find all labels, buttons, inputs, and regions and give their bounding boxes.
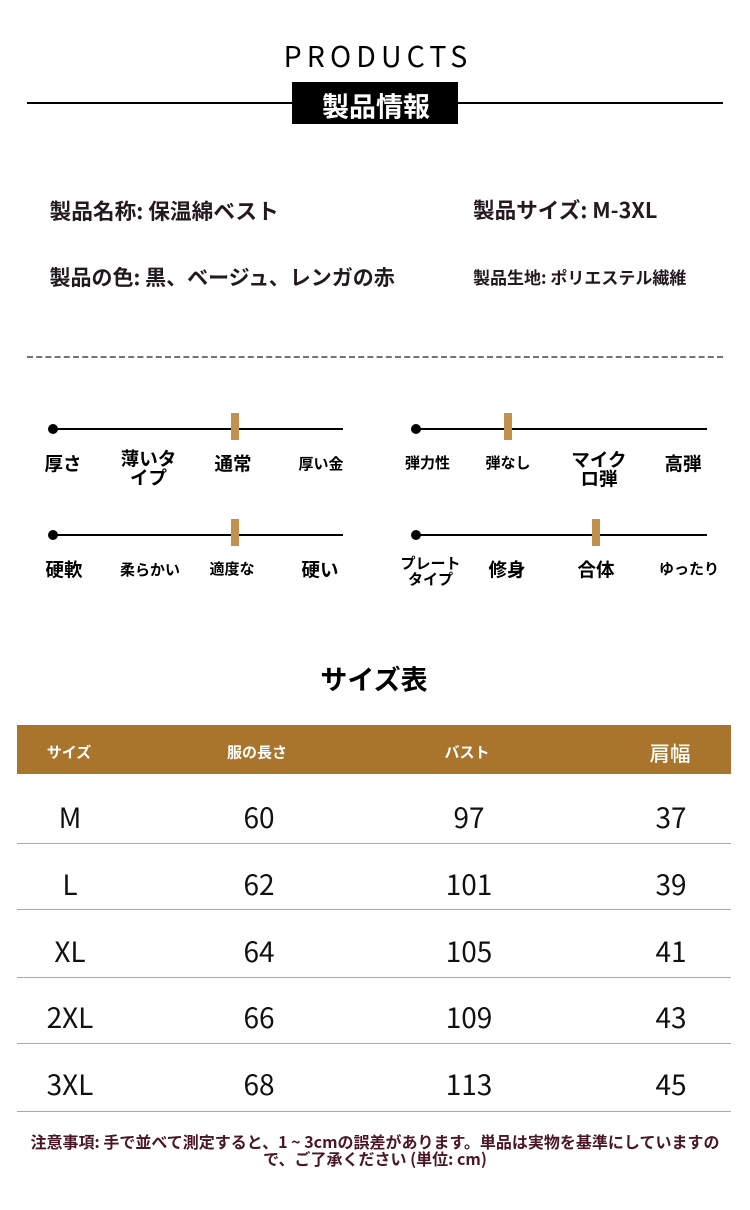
shoulder: 45 xyxy=(655,1064,687,1104)
size: M xyxy=(59,797,81,837)
label: micro stretch: ロ弾 xyxy=(580,466,618,492)
divider line left xyxy=(27,102,293,104)
text: product size: 製品サイズ: M-3XL xyxy=(473,194,657,225)
bust: 97 xyxy=(453,797,485,837)
table row: 3XL xyxy=(47,1064,687,1104)
slider: hardness xyxy=(45,519,343,582)
label: micro stretch xyxy=(571,447,627,492)
marker xyxy=(231,413,239,440)
label: elasticity: 弾力性 xyxy=(405,452,450,473)
label: hardness: 硬軟 xyxy=(45,556,83,582)
shoulder: 39 xyxy=(655,864,687,904)
size: XL xyxy=(54,931,86,971)
bust: 113 xyxy=(446,1064,492,1104)
size: 3XL xyxy=(47,1064,93,1104)
label: thin type xyxy=(121,446,176,491)
label: thin type: イプ xyxy=(130,465,167,491)
divider line right xyxy=(457,102,723,104)
start dot xyxy=(48,424,58,434)
bust: 105 xyxy=(446,931,492,971)
label: micro stretch: マイク xyxy=(571,447,627,473)
marker xyxy=(592,519,600,546)
slider: elasticity xyxy=(405,413,707,492)
label: slim: 修身 xyxy=(488,556,526,582)
label: soft: 柔らかい xyxy=(120,559,180,580)
label: normal: 通常 xyxy=(214,450,252,476)
marker xyxy=(504,413,512,440)
table row: XL xyxy=(54,931,687,971)
header: bust: バスト xyxy=(444,742,490,762)
length: 64 xyxy=(243,931,275,971)
length: 62 xyxy=(243,864,275,904)
header: shoulder: 肩幅 xyxy=(650,737,690,767)
table row: 2XL xyxy=(47,997,687,1037)
label: plate type: タイプ xyxy=(408,568,453,589)
label: moderate: 適度な xyxy=(209,558,255,579)
start dot xyxy=(48,530,58,540)
length: 66 xyxy=(243,997,275,1037)
label: thick: 厚い金 xyxy=(298,453,344,474)
bust: 109 xyxy=(446,997,492,1037)
table row: M xyxy=(59,797,687,837)
heading: size chart: サイズ表 xyxy=(320,658,428,698)
size: 2XL xyxy=(47,997,93,1037)
label: thin type: 薄いタ xyxy=(121,446,176,472)
bust: 101 xyxy=(446,864,492,904)
slider: fit xyxy=(400,519,719,589)
slider: thickness xyxy=(44,413,344,491)
label: hard: 硬い xyxy=(301,556,339,582)
track xyxy=(53,428,343,430)
text: product colours: 製品の色: 黒、ベージュ、レンガの赤 xyxy=(50,262,395,292)
shoulder: 43 xyxy=(655,997,687,1037)
table row: L xyxy=(62,864,687,904)
track xyxy=(53,534,343,536)
footnote: で、ご了承ください (単位: cm) xyxy=(263,1146,487,1170)
label: thickness: 厚さ xyxy=(44,450,82,476)
header: length: 服の長さ xyxy=(227,742,287,762)
table header xyxy=(17,725,731,774)
start dot xyxy=(411,530,421,540)
label: plate type: プレート xyxy=(400,552,461,573)
shoulder: 37 xyxy=(655,797,687,837)
footnote: 注意事項: 手で並べて測定すると、1 ~ 3cmの誤差があります。単品は実物を基準にしていますの xyxy=(31,1129,719,1153)
size: L xyxy=(62,864,78,904)
label: high stretch: 高弾 xyxy=(664,450,702,476)
shoulder: 41 xyxy=(655,931,687,971)
text: product material: 製品生地: ポリエステル繊維 xyxy=(473,264,686,289)
marker xyxy=(231,519,239,546)
track xyxy=(416,428,707,430)
badge text: 製品情報 xyxy=(322,86,430,124)
label: loose: ゆったり xyxy=(659,558,719,579)
heading badge: product info xyxy=(292,82,458,124)
dashed separator xyxy=(27,356,723,358)
label: plate type xyxy=(400,552,461,589)
label: no stretch: 弾なし xyxy=(485,452,531,473)
footnote xyxy=(31,1129,719,1170)
track xyxy=(416,534,707,536)
start dot xyxy=(411,424,421,434)
heading: PRODUCTS: PRODUCTS xyxy=(284,35,472,76)
length: 68 xyxy=(243,1064,275,1104)
header: size: サイズ xyxy=(47,742,91,762)
length: 60 xyxy=(243,797,275,837)
text: product name: 製品名称: 保温綿ベスト xyxy=(50,195,279,226)
label: regular fit: 合体 xyxy=(577,556,615,582)
